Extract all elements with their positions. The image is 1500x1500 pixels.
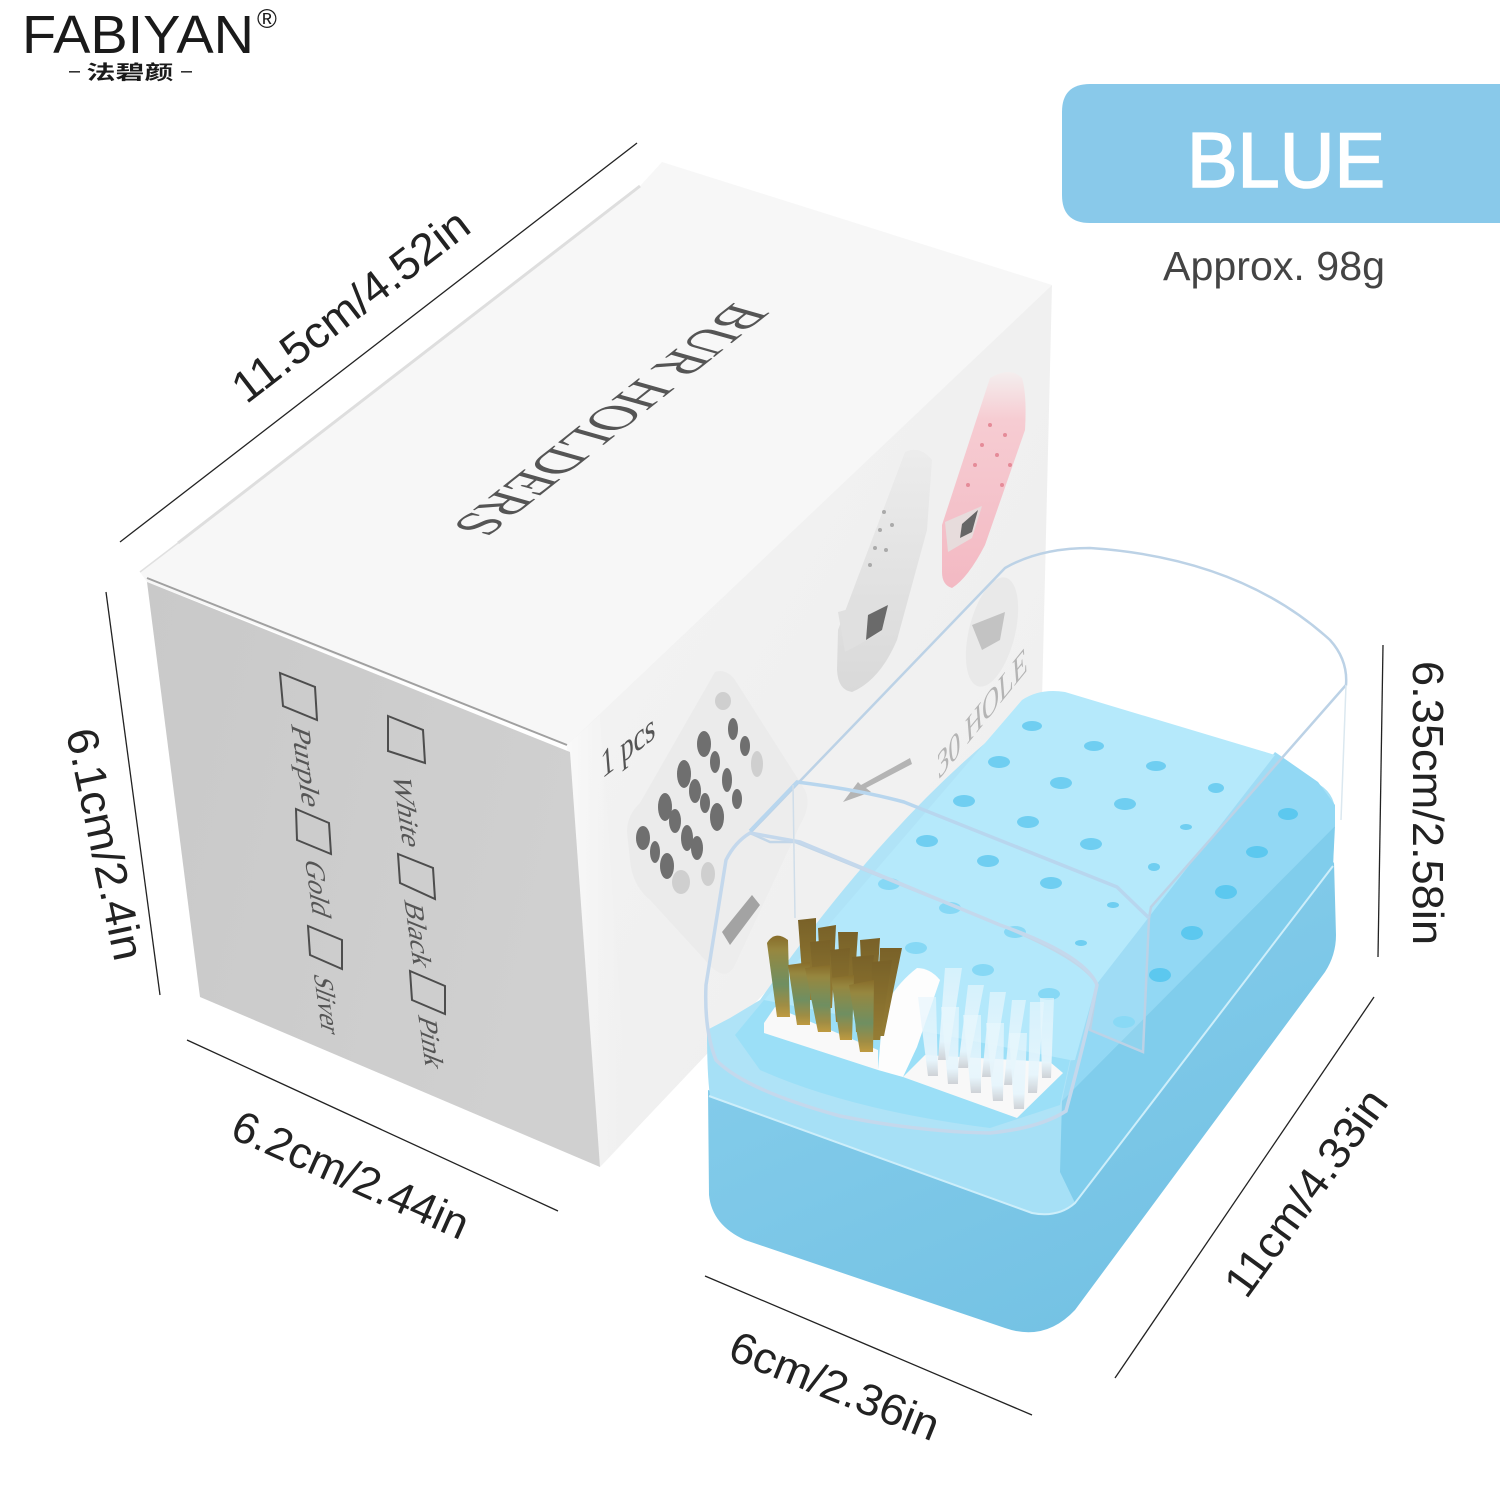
- box left face: [147, 582, 600, 1167]
- logo: FABIYAN: 法碧颜: [87, 62, 173, 84]
- printed label: 30 HOLE: 30 HOLE: [936, 638, 1028, 788]
- cleaning brush: white base: [764, 968, 1063, 1118]
- colour option: Purple: Purple: [284, 720, 327, 814]
- bur holes: [878, 721, 1298, 1028]
- colour option: Sliver: Sliver: [307, 970, 346, 1040]
- holder: blue bur block: [707, 691, 1336, 1332]
- lid: clear plastic cover: [706, 548, 1346, 1133]
- lid upper dome: [750, 548, 1346, 1052]
- weight note: Approx. 98g: [1163, 243, 1385, 289]
- box: bur holders carton: [140, 162, 1052, 1167]
- dimension: holder length: [1115, 997, 1398, 1378]
- holder side face: [1060, 826, 1335, 1203]
- brush recess: [735, 1000, 1070, 1128]
- colour option: Black: Black: [398, 896, 437, 974]
- logo: FABIYAN: ®: [257, 4, 277, 34]
- colour option: Pink: Pink: [412, 1011, 450, 1075]
- colour checkboxes: [280, 673, 445, 1014]
- printed bur tray: [627, 671, 808, 974]
- dimension: holder height: [1378, 645, 1452, 957]
- box top face: [140, 162, 1052, 745]
- logo: FABIYAN: FABIYAN: [22, 5, 254, 65]
- box top face: BUR HOLDERS: [438, 298, 784, 542]
- colour banner: BLUE: [1062, 84, 1500, 223]
- dimension: holder width: 6cm/2.36in: [722, 1322, 947, 1451]
- holder rim top: [1062, 752, 1335, 1101]
- box right face: [567, 285, 1052, 1167]
- dimension: box width: [187, 1040, 558, 1249]
- lid right edge: [1341, 685, 1346, 820]
- logo: FABIYAN: [22, 4, 277, 84]
- dimension: box height: [56, 592, 160, 995]
- lid front shell: [706, 833, 1097, 1133]
- dimension: holder width: [705, 1276, 1032, 1451]
- dimension: box width: 6.2cm/2.44in: [224, 1101, 476, 1249]
- dimension: box length: [120, 143, 637, 542]
- holder upper tier: [707, 700, 1335, 1214]
- dimension: holder height: 6.35cm/2.58in: [1403, 661, 1452, 945]
- printed arrow: [843, 758, 912, 802]
- printed white holder: [837, 450, 932, 692]
- dimension: box height: 6.1cm/2.4in: [56, 724, 153, 965]
- cleaning brush: nylon bristles: [918, 968, 1054, 1109]
- lid back rim: [750, 782, 1149, 918]
- dimension: holder length: 11cm/4.33in: [1215, 1080, 1398, 1306]
- colour option: Gold: Gold: [298, 855, 337, 923]
- printed label: 1 pcs: 1 pcs: [599, 704, 657, 788]
- dimension: box length: 11.5cm/4.52in: [223, 200, 479, 413]
- printed small circle image: [956, 572, 1028, 692]
- holder raised plateau: [760, 691, 1275, 1075]
- cleaning brush: brass bristles: [767, 918, 902, 1052]
- colour banner: BLUE: BLUE: [1187, 116, 1385, 204]
- lid inner edge: [793, 785, 795, 918]
- colour option: White: White: [386, 770, 427, 854]
- holder lower tray: [708, 862, 1336, 1332]
- printed pink holder: [942, 372, 1026, 588]
- seam line: [709, 866, 1333, 1214]
